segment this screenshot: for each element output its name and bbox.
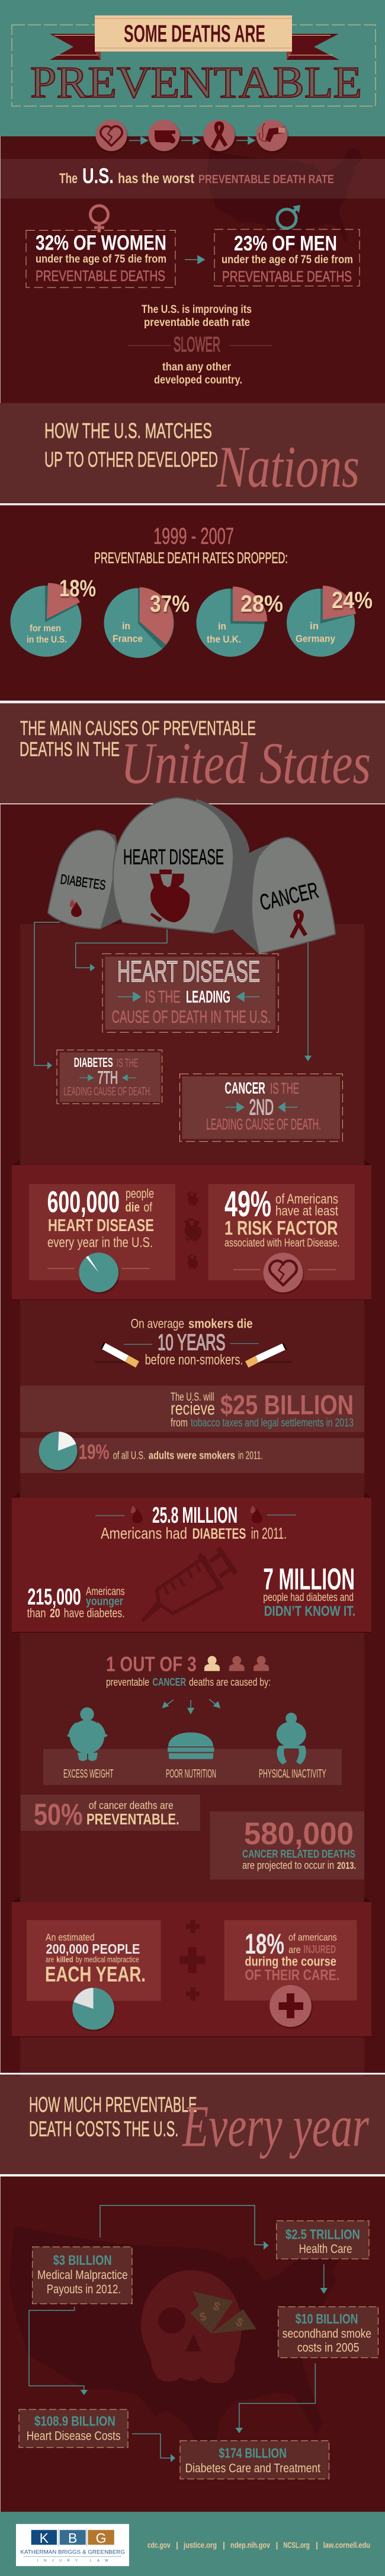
icon: broken heart — [96, 120, 127, 151]
panel: women stat — [26, 230, 175, 287]
icon: money bills: $ — [198, 2310, 208, 2324]
band: worst preventable death rate: PREVENTABLE DEATH RATE — [198, 173, 334, 186]
tombstone: heart disease: HEART DISEASE — [123, 845, 224, 869]
cost box: $174 billion — [180, 2441, 329, 2479]
arrows down — [162, 1699, 220, 1714]
stat: 49%: associated with Heart Disease. — [224, 1237, 339, 1249]
cost box: $108.9 billion: Heart Disease Costs — [27, 2430, 121, 2443]
heading band: developed nations — [0, 403, 385, 505]
icons: people — [204, 1656, 269, 1671]
stat: 215,000 younger — [27, 1584, 125, 1621]
panel: men stat: under the age of 75 die from — [222, 254, 353, 266]
pie: 19% — [39, 1431, 77, 1470]
cancer one out of three: preventable — [106, 1676, 149, 1688]
cost box: $3 billion: Payouts in 2012. — [47, 2283, 121, 2296]
map silhouette bottom — [9, 2220, 355, 2453]
band: cancer causes — [43, 1707, 342, 1785]
heading band: developed nations: HOW THE U.S. MATCHES — [44, 418, 212, 443]
stat: 18% injured: of americans — [288, 1932, 337, 1943]
stat: 200,000 people: killed — [56, 1955, 73, 1964]
stat: 200,000 people: 200,000 PEOPLE — [46, 1941, 140, 1957]
cost box: $174 billion: Diabetes Care and Treatment — [185, 2462, 320, 2475]
icon: left cigarette — [102, 1345, 137, 1364]
heading band: main causes: THE MAIN CAUSES OF PREVENTABLE — [20, 717, 256, 740]
map silhouette top — [207, 148, 362, 251]
tombstones — [48, 798, 335, 954]
box: 50% preventable: PREVENTABLE. — [86, 1810, 179, 1828]
tombstone: cancer — [233, 838, 335, 954]
icon: money bills: $ — [233, 2315, 245, 2330]
cost box: $10 billion — [278, 2307, 378, 2358]
icon: heart organ — [150, 870, 190, 922]
icon: right cigarette — [247, 1346, 285, 1364]
pie: 600,000 sliver — [79, 1252, 118, 1292]
stat: 49%: 1 RISK FACTOR — [224, 1217, 338, 1239]
title: preventable: PREVENTABLE — [30, 58, 362, 107]
cancer one out of three: 1 OUT OF 3 — [106, 1653, 197, 1676]
callout: heart disease leading — [102, 954, 278, 1033]
heading band: main causes: DEATHS IN THE — [20, 739, 120, 761]
icon: male symbol — [277, 205, 300, 228]
callout: diabetes 7th: 7TH — [98, 1068, 118, 1088]
text: improving slower: preventable death rate — [144, 317, 250, 329]
callout: cancer 2nd: CANCER — [224, 1079, 265, 1097]
cancer one out of three — [106, 1653, 271, 1714]
icon: burger — [168, 1733, 214, 1759]
stat: 7 million: people had diabetes and — [263, 1591, 354, 1604]
smokers die earlier: smokers die — [188, 1316, 253, 1331]
arrow — [181, 137, 200, 144]
header teal panel — [0, 0, 385, 136]
pie: France — [104, 587, 190, 658]
band: worst preventable death rate: The — [59, 171, 78, 187]
stat: 18% injured: are — [288, 1944, 301, 1955]
band: $25 billion: The U.S. will — [171, 1391, 214, 1404]
sources: law.cornell.edu — [323, 2540, 370, 2549]
band: worst preventable death rate: U.S. — [82, 164, 114, 188]
heading band: developed nations: UP TO OTHER DEVELOPED — [44, 447, 218, 472]
title banner: SOME DEATHS ARE — [124, 20, 265, 47]
box: 50% preventable — [21, 1795, 200, 1832]
pie: U.K. — [197, 587, 283, 657]
cost box: $2.5 trillion: $2.5 TRILLION — [285, 2226, 360, 2242]
panel: women stat: under the age of 75 die from — [36, 253, 166, 266]
pie: U.K.: the U.K. — [207, 634, 241, 645]
cost box: $108.9 billion: $108.9 BILLION — [34, 2413, 116, 2428]
icon: money bills: $ — [210, 2299, 222, 2314]
icon: ribbon — [204, 120, 235, 151]
box: 580,000: are projected to occur in — [242, 1859, 334, 1871]
band: 19% smokers: in 2011. — [238, 1450, 263, 1462]
text: improving slower: The U.S. is improving its — [142, 303, 252, 316]
icon: inactive person — [277, 1713, 306, 1765]
arrow — [129, 137, 147, 144]
box: 580,000 — [210, 1811, 364, 1880]
logo: KBG: KATHERMAN BRIGGS & GREENBERG — [20, 2549, 125, 2556]
pie: U.K.: in — [218, 621, 226, 632]
stat: 600,000 — [47, 1185, 154, 1292]
cancer one out of three: CANCER — [153, 1676, 186, 1688]
callout: heart disease leading: CAUSE OF DEATH IN THE U.S. — [112, 1008, 271, 1027]
ribbon tails — [50, 34, 339, 60]
stat: 215,000 younger: have diabetes. — [64, 1607, 125, 1621]
stat: 600,000: die — [125, 1200, 140, 1215]
stat: 200,000 people: An estimated — [46, 1932, 95, 1943]
band: 19% smokers: of all U.S. — [113, 1450, 145, 1462]
cancer one out of three: deaths are caused by: — [189, 1676, 271, 1688]
cost box: $3 billion: Medical Malpractice — [37, 2268, 128, 2282]
stat: 18% injured: OF THEIR CARE. — [245, 1967, 339, 1984]
band: $25 billion: $25 BILLION — [220, 1389, 354, 1420]
pie: U.K.: 28% — [240, 591, 283, 617]
text: improving slower — [128, 303, 272, 386]
band: cancer causes: POOR NUTRITION — [166, 1768, 216, 1781]
logo: KBG: INJURY LAW — [37, 2559, 108, 2562]
heading band: every year — [0, 2073, 385, 2177]
logo: KBG: K — [40, 2530, 49, 2546]
sources: ndep.nih.gov — [230, 2540, 270, 2549]
cost box: $108.9 billion — [19, 2409, 128, 2447]
pie: France: 37% — [150, 591, 190, 617]
stat: 49%: of Americans — [275, 1191, 338, 1207]
stat: 18% injured: INJURED — [303, 1944, 336, 1955]
band: 19% smokers: 19% — [79, 1441, 109, 1464]
callout: diabetes 7th: DIABETES — [74, 1055, 113, 1070]
pie: men in the U.S.: for men — [30, 624, 61, 634]
text: improving slower: developed country. — [154, 374, 242, 386]
icon: broken heart circle — [263, 1253, 303, 1292]
panel: death rates dropped — [0, 505, 385, 703]
stat: 49% — [224, 1184, 339, 1292]
band: worst preventable death rate — [0, 159, 385, 199]
cost box: $3 billion — [33, 2247, 132, 2304]
sources: | — [223, 2540, 225, 2549]
band: cancer causes: PHYSICAL INACTIVITY — [259, 1768, 326, 1781]
title banner — [95, 15, 292, 52]
icon: pointing hand with blood — [148, 120, 180, 151]
text: improving slower: than any other — [162, 361, 232, 373]
stat: 18% injured — [245, 1929, 339, 2027]
band: 19% smokers — [20, 1431, 364, 1473]
pie: Germany — [287, 586, 373, 657]
band: $25 billion: from — [171, 1417, 188, 1430]
stat: 49%: 49% — [224, 1184, 271, 1224]
stat: 600,000: every year in the U.S. — [47, 1235, 153, 1251]
stat: 49%: have at least — [275, 1203, 338, 1219]
stat: 7 million — [263, 1562, 355, 1619]
callout: cancer 2nd: 2ND — [249, 1095, 274, 1119]
connectors to cause boxes — [34, 922, 312, 1069]
panel: medical malpractice — [12, 1897, 371, 2038]
stat: 215,000 younger: younger — [86, 1595, 123, 1608]
cost box: $10 billion: $10 BILLION — [296, 2311, 358, 2326]
band: $25 billion — [20, 1386, 364, 1432]
panel: death rates dropped: 1999 - 2007 — [153, 524, 234, 549]
cost box: $174 billion: $174 BILLION — [219, 2446, 287, 2461]
heading band: every year: HOW MUCH PREVENTABLE — [29, 2092, 197, 2117]
icon: female symbol — [90, 206, 108, 232]
icon: drops — [131, 1506, 262, 1523]
stat: 200,000 people: EACH YEAR. — [45, 1962, 146, 1986]
callout: heart disease leading: HEART DISEASE — [117, 955, 260, 988]
panel: heart disease stats — [12, 1160, 371, 1300]
heading band: every year: DEATH COSTS THE U.S. — [29, 2117, 178, 2141]
stat: 7 million: DIDN’T KNOW IT. — [264, 1603, 355, 1619]
band: 19% smokers: adults were smokers — [149, 1450, 235, 1462]
stat: 600,000: 600,000 — [47, 1185, 120, 1219]
text: improving slower: SLOWER — [174, 333, 220, 356]
cost box: $10 billion: costs in 2005 — [297, 2341, 359, 2354]
band: $25 billion: recieve — [171, 1398, 215, 1419]
logo: KBG: G — [96, 2530, 107, 2546]
pie: Germany: 24% — [332, 587, 373, 613]
callout: diabetes 7th: IS THE — [117, 1057, 138, 1070]
icon: cigarette — [256, 120, 288, 151]
icon: syringe — [142, 1548, 236, 1621]
stat: 600,000: people — [126, 1186, 154, 1201]
stat: 200,000 people: are — [46, 1955, 54, 1964]
box: 50% preventable: of cancer deaths are — [89, 1800, 174, 1811]
sources: | — [276, 2540, 278, 2549]
callout: diabetes 7th: LEADING CAUSE OF DEATH. — [63, 1085, 152, 1098]
stat: 200,000 people — [45, 1932, 146, 2030]
stat: 215,000 younger: 20 — [50, 1607, 60, 1621]
stat: 215,000 younger: than — [27, 1607, 46, 1621]
pie: men in the U.S. — [11, 576, 96, 657]
box: 50% preventable: 50% — [34, 1798, 83, 1832]
tombstone: diabetes: DIABETES — [59, 871, 107, 893]
sources — [147, 2540, 370, 2549]
arrow — [236, 137, 255, 144]
tombstone: diabetes — [48, 830, 121, 929]
smokers die earlier: On average — [131, 1316, 184, 1331]
icons: crosses — [179, 1920, 205, 2000]
callout: diabetes 7th — [57, 1050, 162, 1104]
icon: cross circle — [270, 1985, 312, 2027]
center content column — [20, 924, 364, 2073]
cost box: $2.5 trillion: Health Care — [299, 2242, 352, 2256]
box: 580,000: 580,000 — [244, 1817, 354, 1852]
title dashed frame — [12, 25, 376, 106]
icon: excess weight person — [67, 1707, 108, 1761]
icon: skull with money — [141, 2270, 256, 2383]
pie: men in the U.S.: 18% — [59, 576, 96, 602]
pie: France: France — [113, 633, 143, 644]
panel: women stat: 32% OF WOMEN — [36, 231, 166, 255]
footer — [0, 2512, 385, 2576]
cost connectors — [29, 2206, 328, 2462]
pie: Germany: in — [310, 620, 319, 632]
smokers die earlier: 10 YEARS — [158, 1331, 226, 1356]
icon row — [96, 120, 288, 151]
panel: women stat: PREVENTABLE DEATHS — [36, 268, 165, 285]
pie: Germany: Germany — [296, 633, 335, 644]
panel: diabetes stats: in 2011. — [251, 1524, 287, 1542]
smokers die earlier: before non-smokers. — [145, 1352, 243, 1368]
cost box: $2.5 trillion — [277, 2221, 369, 2259]
tombstone: heart disease — [113, 798, 249, 934]
panel: diabetes stats: 25.8 MILLION — [152, 1503, 238, 1528]
pie: France: in — [122, 620, 130, 632]
heading band: main causes — [0, 703, 385, 804]
arrow women to men — [185, 256, 204, 263]
sources: | — [176, 2540, 178, 2549]
sources: cdc.gov — [147, 2540, 171, 2549]
callout: cancer 2nd — [180, 1074, 342, 1142]
panel: men stat: 23% OF MEN — [234, 232, 337, 255]
sources: | — [316, 2540, 318, 2549]
tombstone: cancer: CANCER — [258, 878, 321, 916]
box: 580,000: 2013. — [337, 1860, 356, 1871]
stat: 600,000: HEART DISEASE — [48, 1216, 154, 1235]
panel: diabetes stats: DIABETES — [192, 1526, 246, 1542]
sources: justice.org — [183, 2540, 217, 2549]
cost box: $3 billion: $3 BILLION — [53, 2252, 112, 2268]
panel: diabetes stats: Americans had — [101, 1524, 187, 1542]
icon: blood drop — [70, 899, 82, 917]
smokers die earlier — [95, 1316, 292, 1368]
stat: 18% injured: 18% — [245, 1929, 284, 1960]
icon: ribbon — [291, 912, 306, 938]
callout: cancer 2nd: IS THE — [270, 1079, 299, 1097]
band: worst preventable death rate: has the worst — [118, 171, 194, 187]
stat: 600,000: of — [143, 1200, 153, 1215]
stat: 200,000 people: by medical malpractice — [76, 1955, 139, 1964]
callout: heart disease leading: LEADING — [186, 987, 230, 1006]
sources: NCSL.org — [283, 2540, 310, 2549]
icons: column of hearts — [184, 1191, 201, 1269]
pie: men in the U.S.: in the U.S. — [27, 635, 67, 645]
pie: 200,000 — [72, 1988, 114, 2030]
stat: 215,000 younger: 215,000 — [27, 1584, 81, 1610]
left edge strip — [0, 136, 1, 2512]
stat: 18% injured: during the course — [245, 1954, 336, 1969]
logo: KBG — [16, 2524, 129, 2566]
panel: men stat — [214, 229, 360, 286]
callout: heart disease leading: IS THE — [145, 987, 181, 1006]
panel: diabetes stats — [12, 1492, 371, 1633]
icon: money bills — [190, 2291, 256, 2334]
stat: 215,000 younger: Americans — [86, 1586, 125, 1598]
band: cancer causes: EXCESS WEIGHT — [63, 1768, 114, 1781]
logo: KBG: B — [68, 2530, 77, 2546]
